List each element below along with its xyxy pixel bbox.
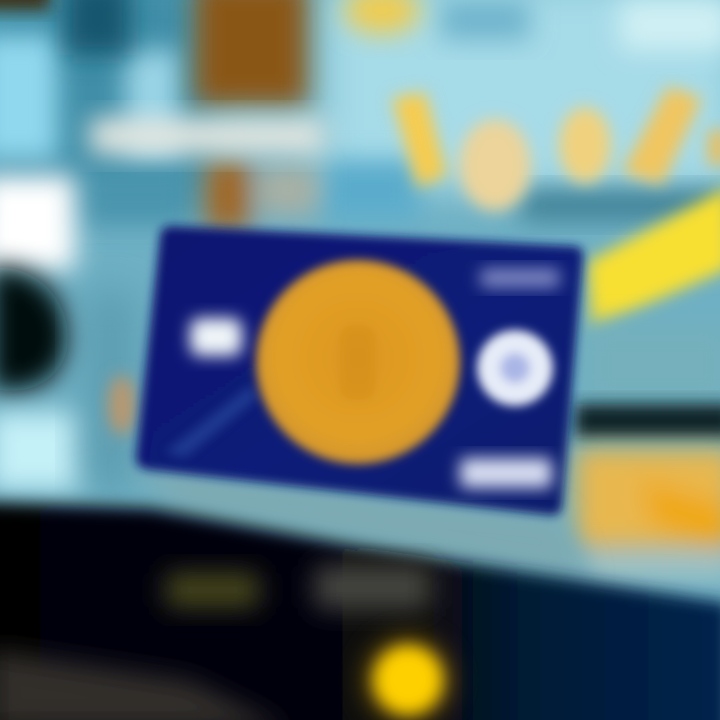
yellow bokeh arcs xyxy=(392,86,720,211)
icon: white chip xyxy=(190,318,242,356)
label: card bottom text xyxy=(460,458,552,488)
left lower blue glare xyxy=(0,412,82,490)
floor: dark foreground xyxy=(0,502,720,720)
grey lower-left streak xyxy=(0,650,290,720)
strip beneath card xyxy=(130,465,590,580)
left black shape xyxy=(0,267,68,391)
mid-left strip xyxy=(85,290,135,490)
icon: white round seal xyxy=(477,330,553,406)
top yellow glow xyxy=(344,0,420,34)
left white glare xyxy=(0,175,75,270)
text: grey blurred label xyxy=(314,565,430,609)
right dark band xyxy=(575,404,720,438)
right orange glow xyxy=(575,448,720,579)
right teal area xyxy=(585,325,720,405)
yellow diagonal bar xyxy=(588,186,720,328)
warm patch left of card xyxy=(108,375,136,435)
label: card top text xyxy=(480,268,560,288)
icon: gold coin xyxy=(256,260,460,464)
panel: blue card xyxy=(136,226,583,515)
card sheen xyxy=(165,385,258,458)
icon: yellow glowing dot xyxy=(364,636,452,720)
text: olive blurred label xyxy=(165,572,260,608)
brown pillar xyxy=(195,0,318,230)
white horizontal band xyxy=(90,118,325,154)
